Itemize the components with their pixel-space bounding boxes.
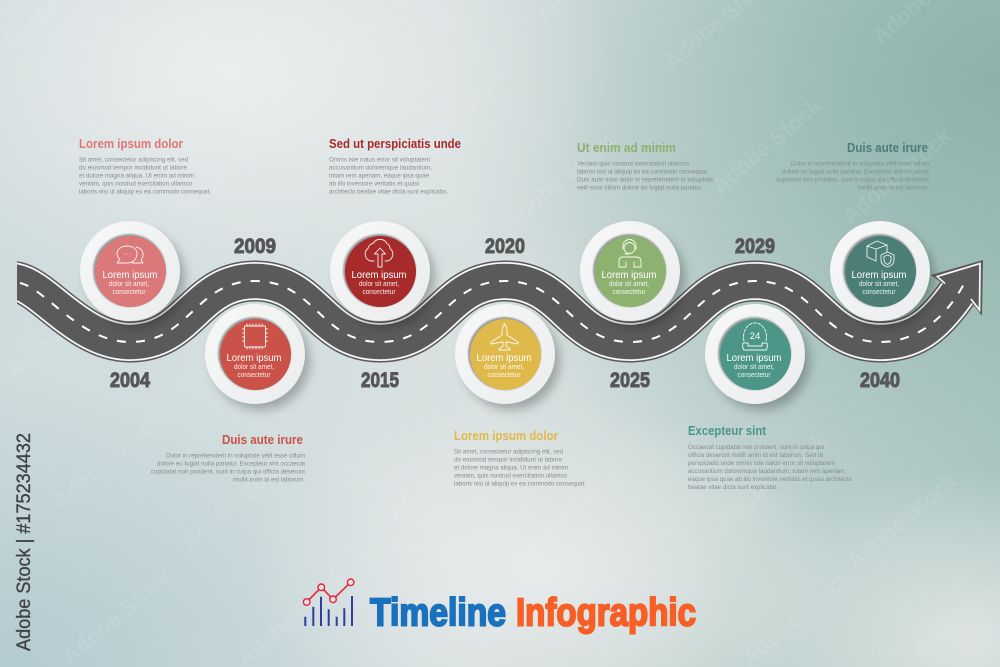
road with arrow bbox=[0, 260, 983, 342]
text block: Lorem ipsum dolor (yellow): veniam, quis nostrud exercitation ullamco bbox=[454, 472, 567, 479]
circle: microchip: Lorem ipsum bbox=[226, 353, 282, 364]
text block: Ut enim ad minim (green): Veniam quis nostrud exercitation ullamco bbox=[577, 160, 689, 168]
watermark pattern: Adobe Stock bbox=[499, 128, 619, 234]
icon: airplane bbox=[491, 324, 518, 350]
icon: chart logo bbox=[303, 579, 354, 626]
text block: Duis aute irure (dark teal): dolore eu fugiat nulla pariatur. Excepteur sint occaecat bbox=[782, 168, 929, 176]
text block: Duis aute irure (red): Dolor in reprehenderit in voluptate velit esse cillum bbox=[166, 453, 305, 460]
watermark pattern: Adobe Stock bbox=[712, 428, 832, 534]
circle: support agent: consectetur bbox=[612, 289, 646, 296]
text block: Ut enim ad minim (green): velit esse cillum dolore eu fugiat nulla pariatur. bbox=[577, 184, 703, 192]
text block: Ut enim ad minim (green): laboris nisi ut aliquip ex ea commodo consequat. bbox=[577, 168, 709, 176]
watermark pattern: Adobe Stock bbox=[167, 118, 287, 224]
circle: box and shield bbox=[830, 221, 935, 327]
watermark pattern: Adobe Stock bbox=[507, 463, 627, 569]
text block: Duis aute irure (red) bbox=[151, 433, 305, 484]
circle: cloud upload: dolor sit amet, bbox=[359, 281, 399, 288]
circle: box and shield: dolor sit amet, bbox=[859, 281, 899, 288]
icon: speech bubbles bbox=[117, 246, 143, 263]
circle: 24 hour phone: dolor sit amet, bbox=[734, 364, 774, 371]
icon: cloud upload bbox=[365, 239, 393, 267]
year labels: 2040 bbox=[860, 369, 900, 392]
text block: Lorem ipsum dolor (pink): veniam, quis nostrud exercitation ullamco bbox=[79, 180, 192, 188]
text block: Ut enim ad minim (green) bbox=[577, 141, 713, 192]
year labels: 2020 bbox=[485, 235, 525, 258]
circle: support agent: dolor sit amet, bbox=[609, 281, 649, 288]
circle: speech bubbles: Lorem ipsum bbox=[102, 270, 158, 281]
text block: Excepteur sint (teal): perspiciatis unde omnis iste natus error sit voluptatem bbox=[688, 460, 835, 467]
text block: Duis aute irure (dark teal): mollit anim id est laborum. bbox=[858, 184, 929, 192]
circle: cloud upload: consectetur bbox=[362, 289, 396, 296]
stock id side label: Adobe Stock | #175234432 bbox=[14, 433, 35, 651]
circle: support agent bbox=[580, 221, 685, 327]
watermark pattern: Adobe Stock bbox=[382, 418, 502, 524]
text block: Sed ut perspiciatis unde (dark red): Sed ut perspiciatis unde bbox=[329, 137, 461, 151]
circle: 24 hour phone bbox=[705, 304, 810, 410]
title: Timeline bbox=[370, 592, 506, 634]
text block: Lorem ipsum dolor (yellow): laboris nisi ut aliquip ex ea commodo consequat. bbox=[454, 480, 586, 487]
text block: Lorem ipsum dolor (yellow): et dolore magna aliqua. Ut enim ad minim bbox=[454, 464, 568, 471]
text block: Duis aute irure (dark teal): Dolor in reprehenderit in voluptate velit esse cillum bbox=[791, 160, 929, 168]
icon: support agent bbox=[619, 240, 641, 267]
text block: Duis aute irure (red): dolore eu fugiat nulla pariatur. Excepteur sint occaecat bbox=[157, 461, 305, 468]
text block: Excepteur sint (teal): officia deserunt mollit anim id est laborum. Sed ut bbox=[688, 452, 823, 459]
year labels bbox=[110, 235, 900, 392]
text block: Lorem ipsum dolor (yellow): do eiusmod tempor incididunt ut labore bbox=[454, 456, 562, 463]
text block: Ut enim ad minim (green): Ut enim ad minim bbox=[577, 141, 676, 155]
watermark pattern: Adobe Stock bbox=[2, 278, 122, 384]
icon: box and shield bbox=[867, 241, 894, 267]
text block: Lorem ipsum dolor (pink): do eiusmod tempor incididunt ut labore bbox=[79, 164, 187, 172]
text block: Duis aute irure (dark teal) bbox=[776, 141, 929, 192]
circle: box and shield: consectetur bbox=[862, 289, 896, 296]
year labels: 2004 bbox=[110, 369, 150, 392]
circle: speech bubbles bbox=[80, 221, 185, 327]
text block: Lorem ipsum dolor (pink) bbox=[79, 137, 211, 196]
year labels: 2015 bbox=[361, 369, 399, 392]
watermark pattern: Adobe Stock bbox=[177, 448, 297, 554]
year labels: 2025 bbox=[610, 369, 650, 392]
text block: Sed ut perspiciatis unde (dark red): accusantium doloremque laudantium, bbox=[329, 164, 432, 172]
icon: microchip bbox=[242, 324, 268, 349]
circle: cloud upload: Lorem ipsum bbox=[352, 270, 406, 281]
text block: Sed ut perspiciatis unde (dark red): Omnis iste natus error sit voluptatem bbox=[329, 156, 430, 164]
text block: Duis aute irure (red): cupidatat non proident, sunt in culpa qui officia deserunt bbox=[151, 469, 305, 476]
text block: Lorem ipsum dolor (pink): Sit amet, consectetur adipiscing elit, sed bbox=[79, 156, 188, 164]
watermark pattern: Adobe Stock bbox=[57, 563, 177, 667]
year labels: 2029 bbox=[735, 235, 775, 258]
text block: Duis aute irure (dark teal): Duis aute irure bbox=[847, 141, 928, 155]
circle: airplane bbox=[455, 304, 560, 410]
circle: airplane: Lorem ipsum bbox=[476, 353, 532, 364]
circle: 24 hour phone: 24 bbox=[750, 331, 760, 342]
text block: Lorem ipsum dolor (yellow): Sit amet, consectetur adipiscing elit, sed bbox=[454, 448, 563, 455]
circle: support agent: Lorem ipsum bbox=[602, 270, 656, 281]
title bbox=[370, 592, 696, 634]
circle: microchip bbox=[205, 304, 310, 410]
circle: 24 hour phone: consectetur bbox=[738, 372, 771, 379]
text block: Lorem ipsum dolor (pink): laboris nisi ut aliquip ex ea commodo consequat. bbox=[79, 188, 211, 196]
circle: box and shield: Lorem ipsum bbox=[852, 270, 906, 281]
year labels: 2009 bbox=[234, 235, 276, 258]
watermark pattern: Adobe Stock bbox=[707, 93, 827, 199]
text block: Excepteur sint (teal): Occaecat cupidatat non proident, sunt in culpa qui bbox=[688, 444, 824, 451]
circle: speech bubbles: consectetur bbox=[112, 289, 146, 296]
text block: Lorem ipsum dolor (pink): Lorem ipsum dolor bbox=[79, 137, 183, 151]
circle: airplane: dolor sit amet, bbox=[484, 364, 524, 371]
text block: Duis aute irure (red): mollit anim id est laborum. bbox=[233, 477, 305, 484]
watermark pattern: Adobe Stock bbox=[42, 73, 162, 179]
text block: Ut enim ad minim (green): Duis aute irure dolor in reprehenderit in voluptate bbox=[577, 176, 713, 184]
text block: Sed ut perspiciatis unde (dark red): ab illo inventore veritatis et quasi bbox=[329, 180, 419, 188]
circle: speech bubbles: dolor sit amet, bbox=[109, 281, 149, 288]
circle: 24 hour phone: Lorem ipsum bbox=[726, 353, 782, 364]
circle: microchip: dolor sit amet, bbox=[234, 364, 274, 371]
text block: Excepteur sint (teal): beatae vitae dicta sunt explicabo. bbox=[688, 484, 778, 491]
circle: cloud upload bbox=[330, 221, 435, 327]
icon: 24 hour phone bbox=[743, 323, 767, 350]
text block: Excepteur sint (teal): eaque ipsa quae ab illo inventore veritatis et quasi architecto bbox=[688, 476, 852, 483]
text block: Lorem ipsum dolor (yellow): Lorem ipsum dolor bbox=[454, 429, 558, 443]
text block: Lorem ipsum dolor (pink): et dolore magna aliqua. Ut enim ad minim bbox=[79, 172, 194, 180]
text block: Sed ut perspiciatis unde (dark red): totam rem aperiam, eaque ipsa quae bbox=[329, 172, 429, 180]
text block: Lorem ipsum dolor (yellow) bbox=[454, 429, 586, 487]
watermark pattern: Adobe Stock bbox=[397, 63, 517, 169]
text block: Excepteur sint (teal) bbox=[688, 424, 852, 491]
text block: Duis aute irure (red): Duis aute irure bbox=[222, 433, 303, 447]
text block: Sed ut perspiciatis unde (dark red): architecto beatae vitae dicta sunt explicabo. bbox=[329, 188, 448, 196]
circle: microchip: consectetur bbox=[238, 372, 271, 379]
watermark pattern: Adobe Stock bbox=[842, 468, 962, 574]
text block: Excepteur sint (teal): accusantium doloremque laudantium, totam rem aperiam, bbox=[688, 468, 846, 475]
circle: airplane: consectetur bbox=[488, 372, 521, 379]
text block: Excepteur sint (teal): Excepteur sint bbox=[688, 424, 767, 438]
watermark pattern: Adobe Stock bbox=[837, 123, 957, 229]
text block: Sed ut perspiciatis unde (dark red) bbox=[329, 137, 461, 196]
text block: Duis aute irure (dark teal): cupidatat non proident, sunt in culpa qui officia deserunt bbox=[776, 176, 929, 184]
title: Infographic bbox=[516, 592, 696, 634]
watermark pattern: Adobe Stock bbox=[47, 408, 167, 514]
